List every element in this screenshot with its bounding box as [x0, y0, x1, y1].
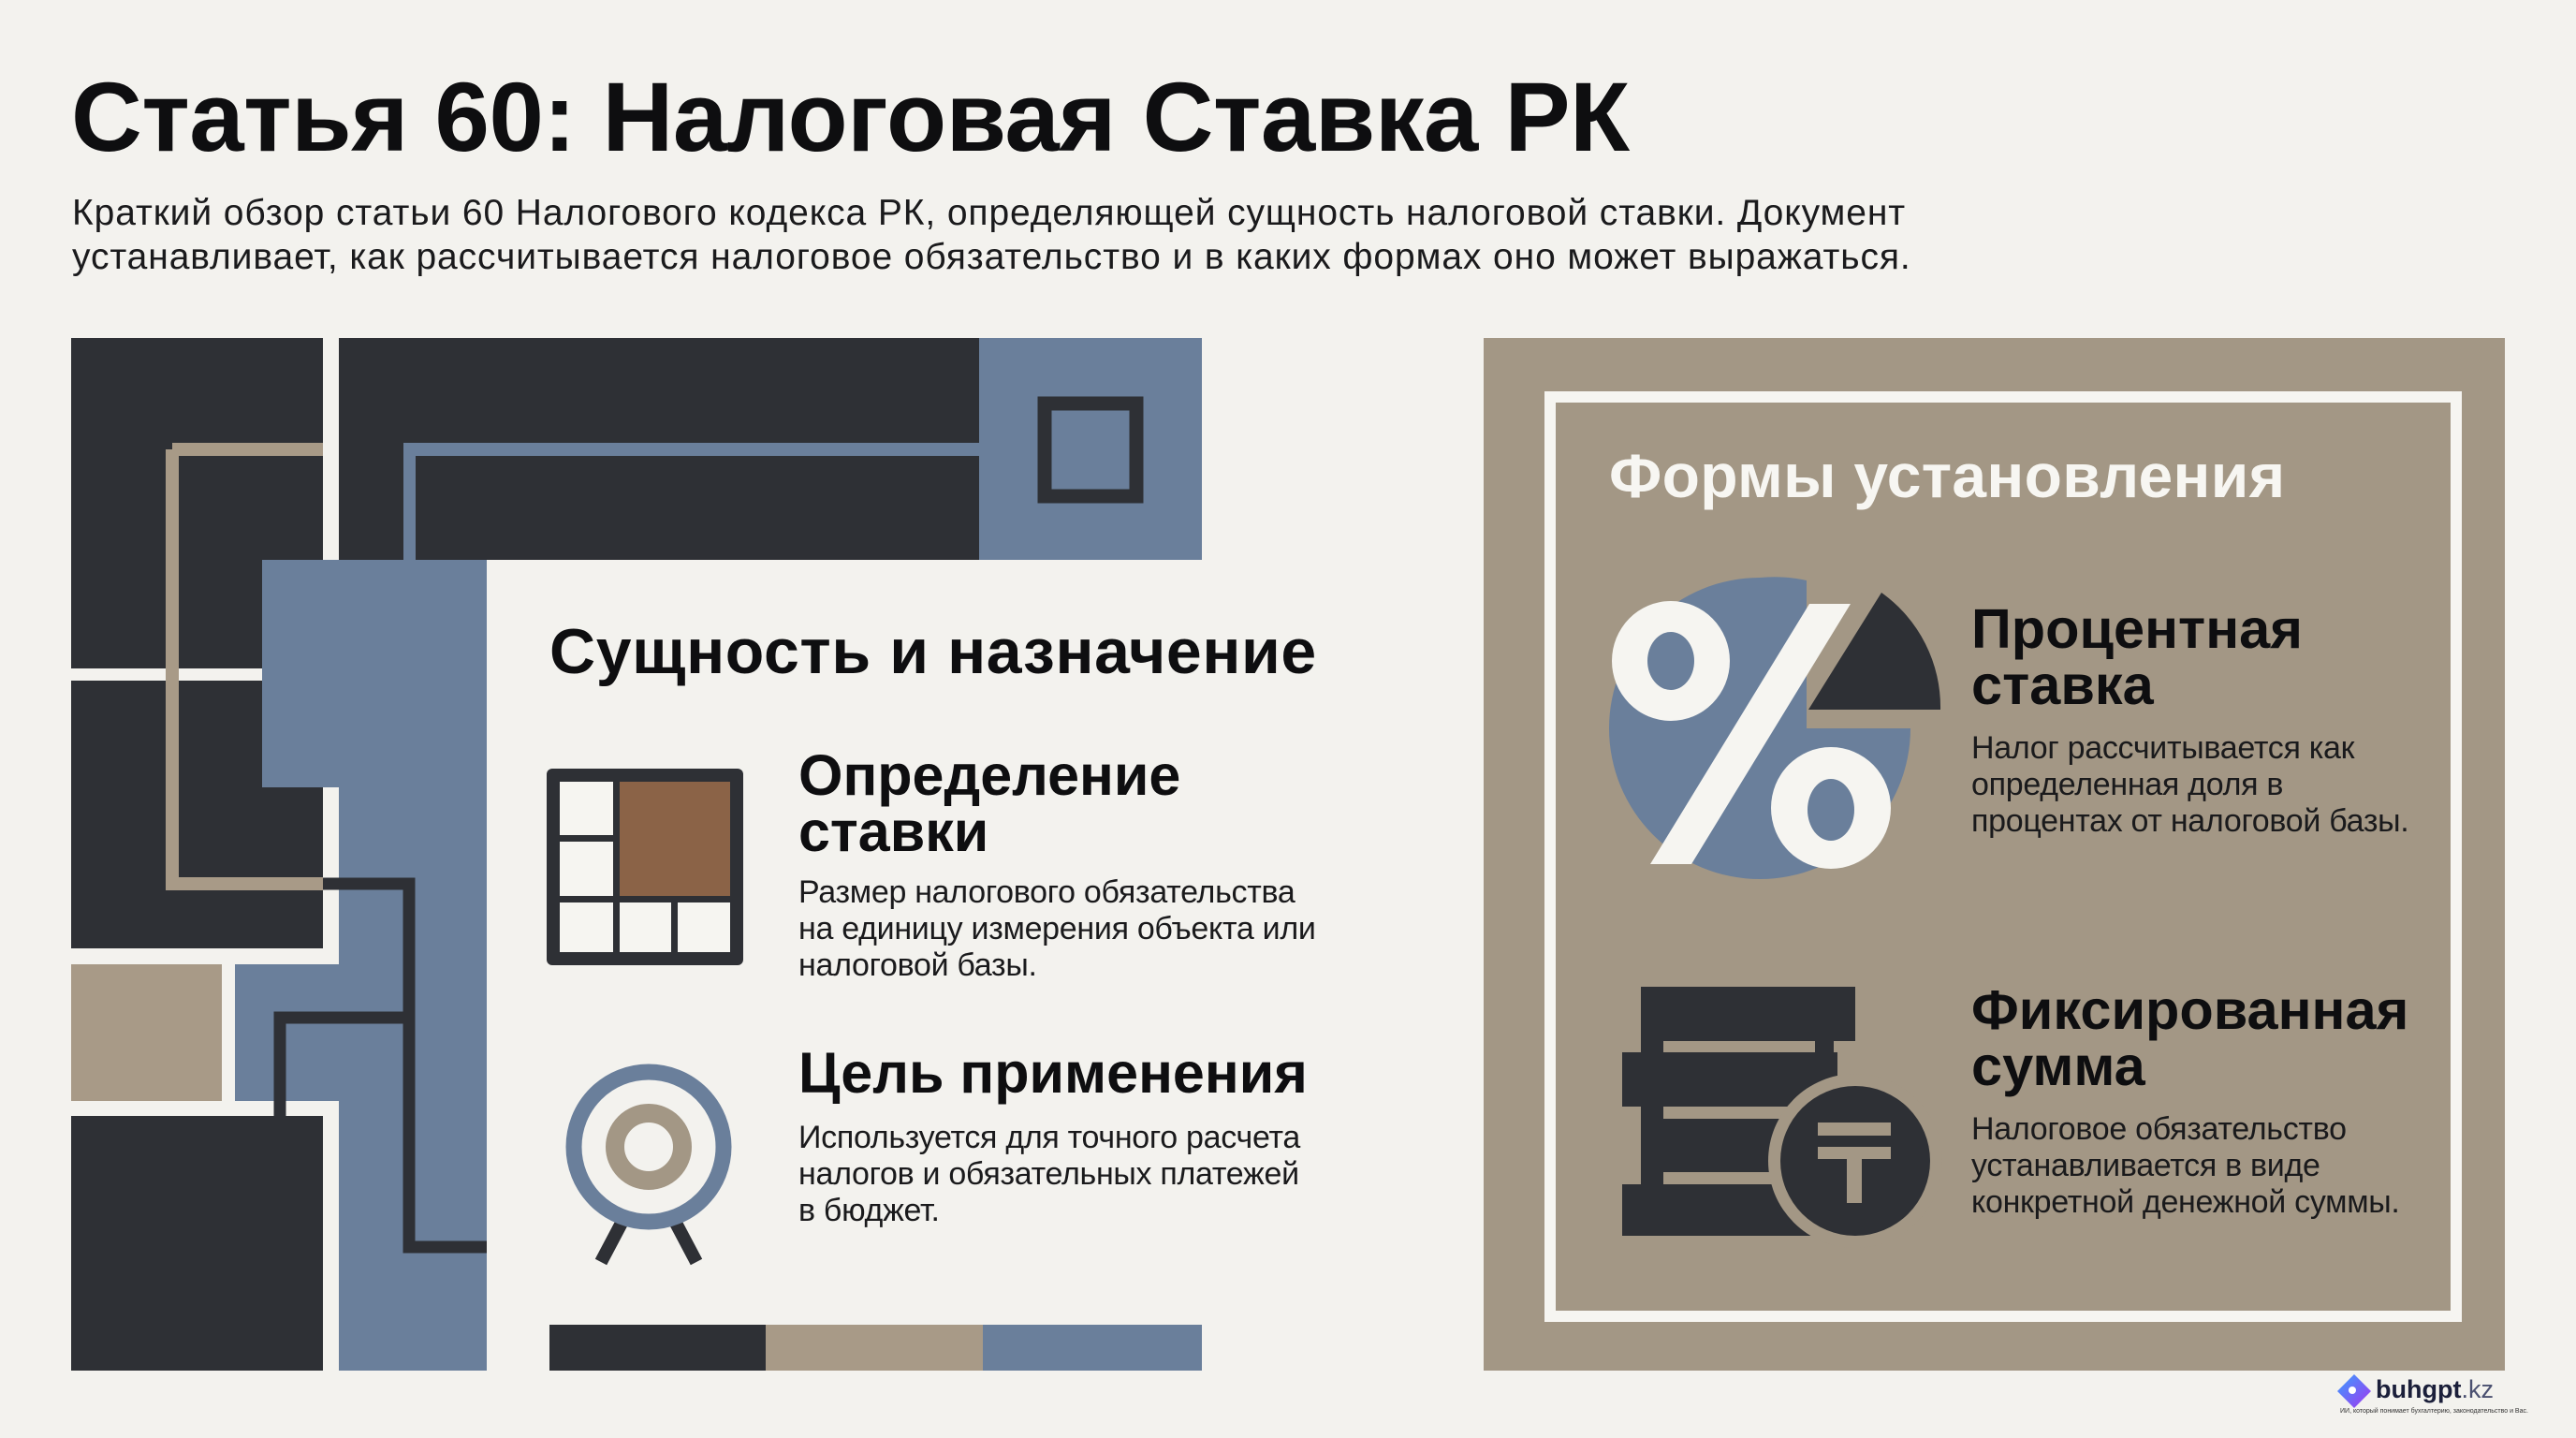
- subtitle: Краткий обзор статьи 60 Налогового кодекса РК, определяющей сущность налоговой ставки. Документ: [72, 193, 1906, 233]
- block: percentage rate: Налог рассчитывается как: [1971, 730, 2354, 766]
- block: purpose of application: Цель применения: [798, 1041, 1308, 1105]
- block: rate definition: на единицу измерения объекта или: [798, 911, 1316, 946]
- block: fixed amount: конкретной денежной суммы.: [1971, 1184, 2400, 1220]
- block: percentage rate: ставка: [1971, 653, 2154, 716]
- block: rate definition: Размер налогового обязательства: [798, 874, 1295, 910]
- block: percentage rate: процентах от налоговой базы.: [1971, 803, 2408, 839]
- block: fixed amount: Фиксированная: [1971, 978, 2408, 1041]
- panel: left decorative geometric frame: [71, 338, 1202, 1371]
- logo: buhgpt.kz: [2376, 1375, 2494, 1403]
- block: percentage rate: [1971, 597, 2408, 839]
- color bars: [549, 1325, 1202, 1371]
- block: rate definition: ставки: [798, 800, 988, 863]
- block: purpose of application: налогов и обязательных платежей: [798, 1156, 1299, 1192]
- icon: percent: [1609, 577, 1940, 879]
- block: rate definition: Определение: [798, 743, 1180, 807]
- icon: grid: [547, 769, 743, 965]
- block: percentage rate: определенная доля в: [1971, 767, 2283, 802]
- title: Статья 60: Налоговая Ставка РК: [71, 63, 1630, 172]
- heading: forms: Формы установления: [1609, 441, 2285, 510]
- block: purpose of application: [798, 1041, 1308, 1228]
- block: purpose of application: Используется для точного расчета: [798, 1120, 1300, 1155]
- subtitle: устанавливает, как рассчитывается налоговое обязательство и в каких формах оно может выражаться.: [72, 237, 1911, 277]
- panel: forms of establishment: [1484, 338, 2505, 1371]
- icon: coins with tenge: [1622, 987, 1930, 1236]
- block: rate definition: налоговой базы.: [798, 947, 1037, 983]
- subtitle: [72, 193, 1911, 277]
- block: purpose of application: в бюджет.: [798, 1193, 940, 1228]
- logo: [2337, 1374, 2528, 1415]
- block: percentage rate: Процентная: [1971, 597, 2303, 660]
- heading: essence and purpose: Сущность и назначение: [549, 616, 1317, 687]
- block: fixed amount: устанавливается в виде: [1971, 1148, 2320, 1183]
- logo: ИИ, который понимает бухгалтерию, законодательство и Вас.: [2340, 1408, 2528, 1415]
- block: fixed amount: [1971, 978, 2408, 1220]
- block: rate definition: [798, 743, 1316, 983]
- block: fixed amount: сумма: [1971, 1034, 2145, 1097]
- icon: target: [565, 1064, 732, 1266]
- block: fixed amount: Налоговое обязательство: [1971, 1111, 2347, 1147]
